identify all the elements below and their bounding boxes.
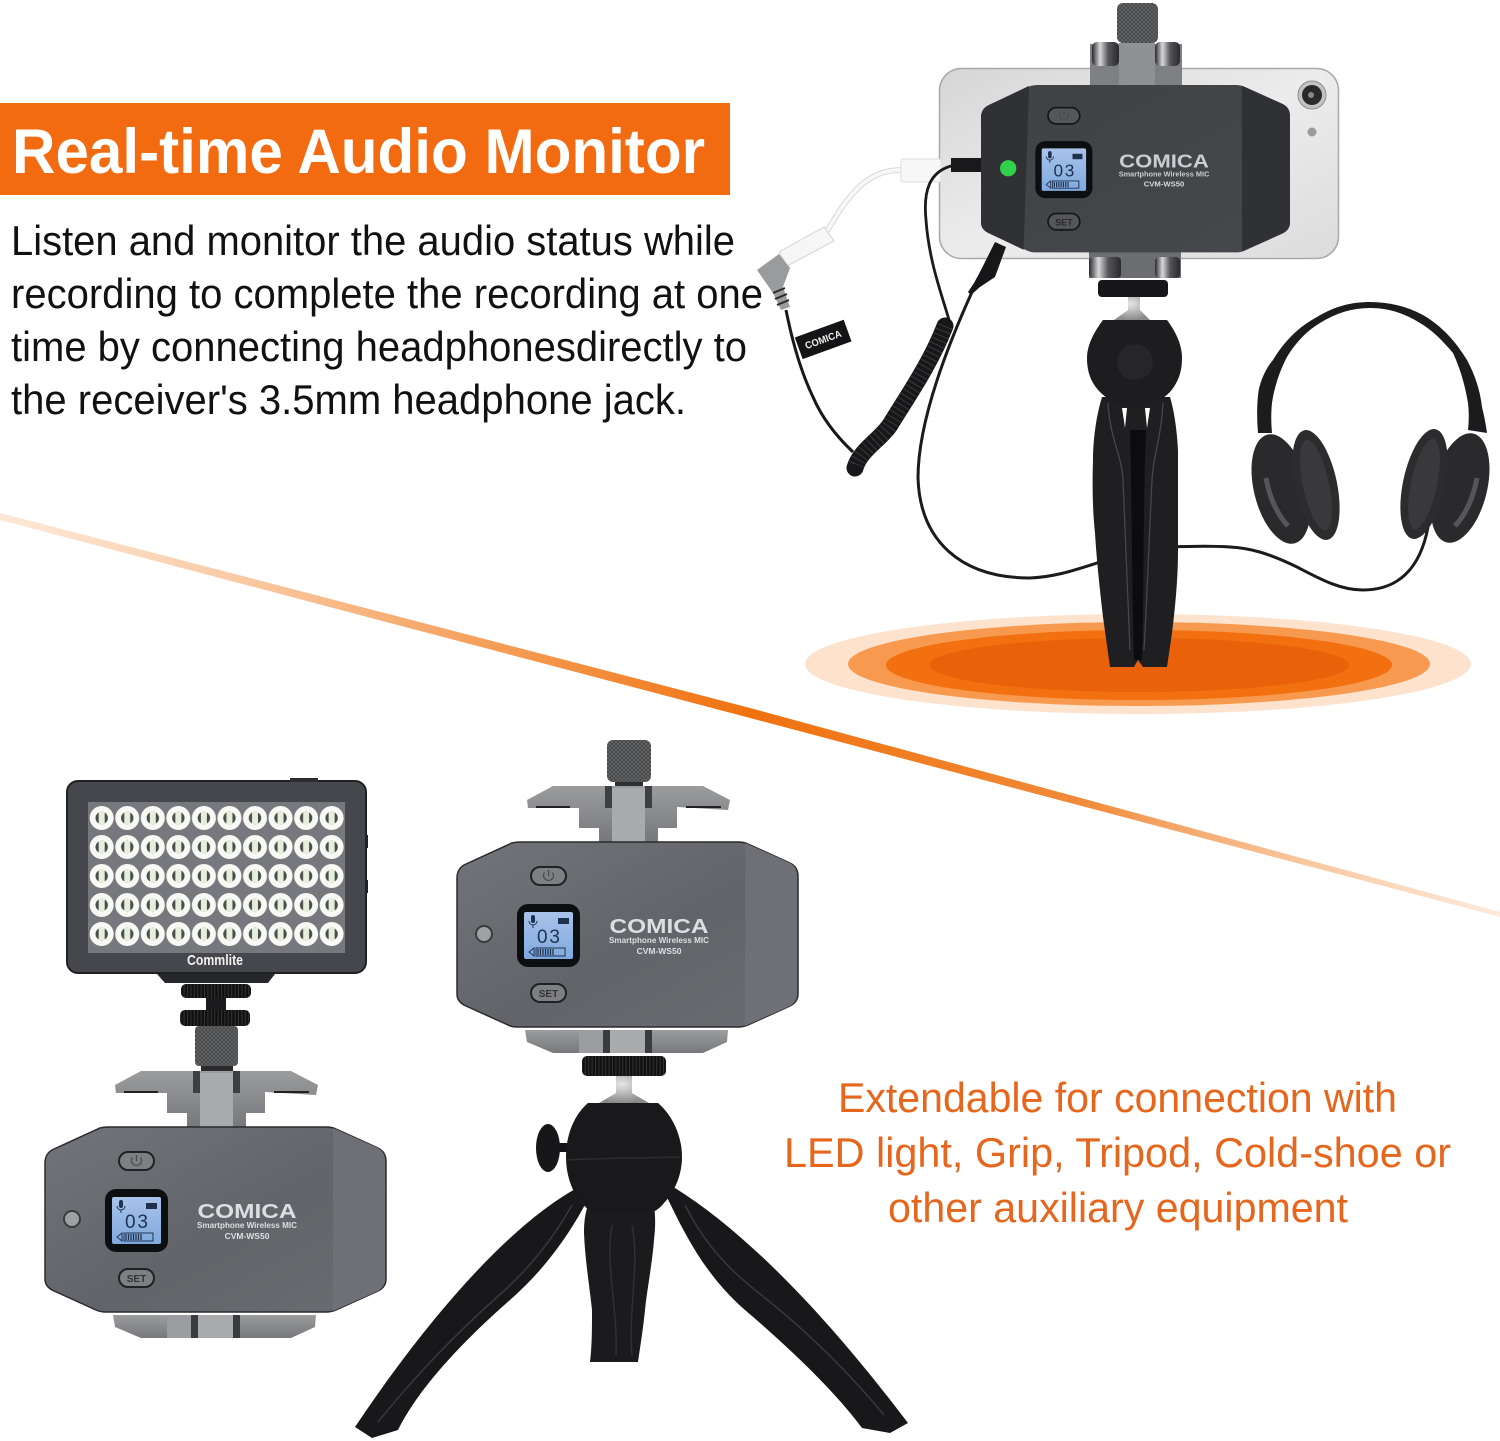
headphone cable (918, 292, 1428, 590)
description text (11, 217, 763, 423)
diagonal orange divider (0, 513, 1500, 917)
orange glow ellipses under tripod (805, 614, 1471, 714)
lcd center (517, 904, 580, 967)
light brand: Commlite (187, 952, 243, 969)
lcd left (105, 1189, 168, 1252)
cable tag brand: COMICA (804, 329, 843, 352)
brand center (609, 916, 709, 956)
set button (1048, 214, 1080, 230)
description text: Listen and monitor the audio status while (11, 217, 735, 264)
receiver on phone (981, 85, 1290, 252)
knob (607, 740, 651, 787)
extendable caption: Extendable for connection with (838, 1074, 1397, 1121)
description text: time by connecting headphonesdirectly to (11, 323, 747, 370)
brand text (1119, 151, 1210, 188)
icon: mini tripod with ball head (355, 1056, 908, 1438)
description text: recording to complete the recording at one (11, 270, 763, 317)
power button left (119, 1152, 154, 1170)
brand center: Smartphone Wireless MIC (609, 935, 709, 945)
headphones (1241, 302, 1500, 550)
icon: bottom jack (968, 242, 1006, 295)
set button center (531, 984, 566, 1002)
center receiver with clamps (457, 740, 798, 1053)
brand left: Smartphone Wireless MIC (197, 1220, 297, 1230)
set button left: SET (127, 1274, 146, 1285)
extendable caption: LED light, Grip, Tripod, Cold-shoe or (784, 1129, 1451, 1176)
brand left: COMICA (198, 1201, 296, 1223)
brand text: Smartphone Wireless MIC (1119, 169, 1210, 178)
brand left: CVM-WS50 (225, 1231, 270, 1241)
icon: jack on side of phone (951, 158, 981, 172)
icon: coiled cable (855, 158, 981, 468)
brand text: CVM-WS50 (1144, 179, 1184, 188)
brand text: COMICA (1119, 151, 1209, 171)
lcd display: 03 (1053, 160, 1074, 180)
set button center: SET (539, 989, 558, 1000)
tripod ball (1087, 320, 1182, 407)
icon: top clamp with knob (1090, 3, 1182, 85)
icon: right-angle grey plug and label (757, 254, 853, 452)
icon: white adapter cable (779, 159, 941, 266)
icon: led video light (67, 778, 368, 983)
icon: bottom clamp (1089, 252, 1181, 278)
lcd display (1035, 141, 1092, 198)
brand center: CVM-WS50 (637, 946, 682, 956)
status led (1000, 160, 1016, 176)
title: Real-time Audio Monitor (12, 117, 705, 187)
power button center (531, 867, 566, 885)
right ear cup (1392, 425, 1500, 549)
description text: the receiver's 3.5mm headphone jack. (11, 376, 686, 423)
title banner (0, 103, 730, 195)
set button: SET (1055, 217, 1073, 227)
ball head (566, 1103, 682, 1212)
icon: tripod holding phone (1087, 280, 1182, 667)
side knob (536, 1124, 567, 1172)
lcd left: 03 (125, 1212, 148, 1233)
left receiver with clamps (45, 1071, 386, 1338)
extendable caption (784, 1074, 1451, 1231)
lcd center: 03 (537, 927, 560, 948)
left ear cup (1241, 426, 1348, 550)
brand left (197, 1201, 297, 1241)
extendable caption: other auxiliary equipment (888, 1184, 1348, 1231)
set button left (119, 1269, 154, 1287)
brand center: COMICA (610, 916, 708, 938)
icon: light mount knobs (180, 984, 251, 1073)
icon: smartphone (940, 68, 1338, 258)
power button (1048, 108, 1080, 124)
